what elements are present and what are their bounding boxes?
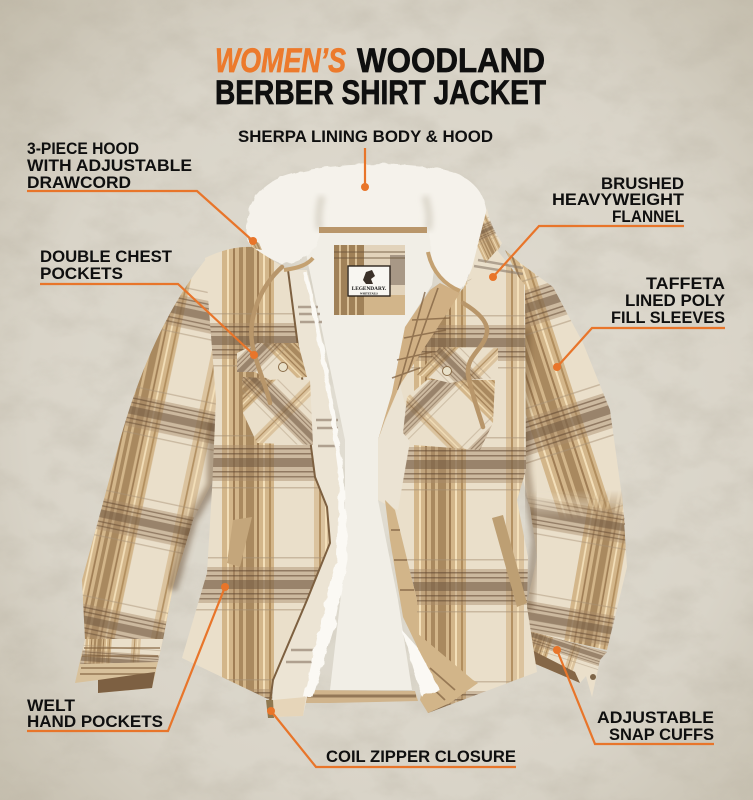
left cuff <box>75 639 163 693</box>
hood plaid side <box>247 208 502 292</box>
left zipper facing <box>273 270 343 717</box>
title <box>215 42 546 112</box>
sherpa hood <box>246 164 488 292</box>
label: welt hand pockets: HAND POCKETS <box>27 713 163 731</box>
right cuff underside <box>503 640 580 683</box>
right lapel <box>378 283 460 440</box>
right sleeve shading <box>526 330 536 610</box>
lower right tan strip <box>385 500 478 713</box>
neck label patch: WHITETAILS <box>360 292 378 296</box>
left sleeve <box>82 258 218 640</box>
right zip facing cream <box>378 385 412 510</box>
title: WOODLAND <box>357 42 545 80</box>
left sleeve shading <box>172 420 212 590</box>
right upper sleeve <box>505 250 625 525</box>
label: taffeta sleeves: FILL SLEEVES <box>611 309 725 327</box>
label: taffeta sleeves: LINED POLY <box>625 292 725 310</box>
left collar tape <box>284 258 313 270</box>
label: adjustable snap cuffs: ADJUSTABLE <box>597 709 714 727</box>
label: brushed flannel: HEAVYWEIGHT <box>552 191 684 209</box>
label: welt hand pockets: WELT <box>27 697 75 715</box>
right forearm <box>518 490 627 650</box>
collar tape <box>319 227 427 233</box>
title: WOMEN’S <box>215 42 346 80</box>
sherpa lining <box>300 225 440 690</box>
label: 3-piece hood: WITH ADJUSTABLE <box>27 157 192 175</box>
drawcords <box>251 267 487 427</box>
label: taffeta sleeves <box>553 275 725 371</box>
neck label patch <box>334 245 405 315</box>
label: double chest pockets <box>40 248 258 359</box>
neck label patch: LEGENDARY. <box>352 286 387 292</box>
left facing hem <box>273 697 306 717</box>
label: 3-piece hood: DRAWCORD <box>27 174 131 192</box>
label: adjustable snap cuffs: SNAP CUFFS <box>609 726 714 744</box>
right welt pocket <box>492 515 527 607</box>
label: welt hand pockets <box>27 583 229 731</box>
label: taffeta sleeves: TAFFETA <box>646 275 725 293</box>
brand label <box>348 266 390 296</box>
label: sherpa lining <box>238 128 493 191</box>
left welt pocket <box>227 517 252 567</box>
zipper pull <box>266 700 274 718</box>
label: double chest pockets: POCKETS <box>40 265 123 283</box>
label: coil zipper closure <box>267 707 516 767</box>
right shoulder stripes <box>474 260 523 274</box>
label: brushed flannel: BRUSHED <box>601 175 684 193</box>
right chest pocket <box>403 347 498 450</box>
label: coil zipper closure: COIL ZIPPER CLOSURE <box>326 748 516 766</box>
back hem <box>305 690 418 703</box>
label: brushed flannel <box>489 175 684 281</box>
label: brushed flannel: FLANNEL <box>612 208 684 226</box>
left body panel <box>182 247 330 700</box>
title: BERBER SHIRT JACKET <box>215 74 546 112</box>
label: sherpa lining: SHERPA LINING BODY & HOOD <box>238 128 493 146</box>
icon: horse <box>363 270 375 284</box>
right sherpa edge <box>402 630 440 697</box>
left sherpa edge <box>303 272 348 697</box>
label: double chest pockets: DOUBLE CHEST <box>40 248 172 266</box>
jacket illustration <box>75 164 627 718</box>
left chest pocket <box>237 343 313 445</box>
label: 3-piece hood: 3-PIECE HOOD <box>27 140 139 158</box>
hood inner shading <box>319 196 429 230</box>
label: 3-piece hood <box>27 140 257 245</box>
snap on cuff <box>590 674 596 680</box>
left zipper line <box>270 270 330 702</box>
right collar cord band <box>428 252 460 291</box>
facing stripes <box>286 307 340 662</box>
label: adjustable snap cuffs <box>553 646 714 744</box>
right cuff <box>503 628 607 697</box>
left cuff underside <box>98 672 155 693</box>
right body panel <box>378 250 537 713</box>
